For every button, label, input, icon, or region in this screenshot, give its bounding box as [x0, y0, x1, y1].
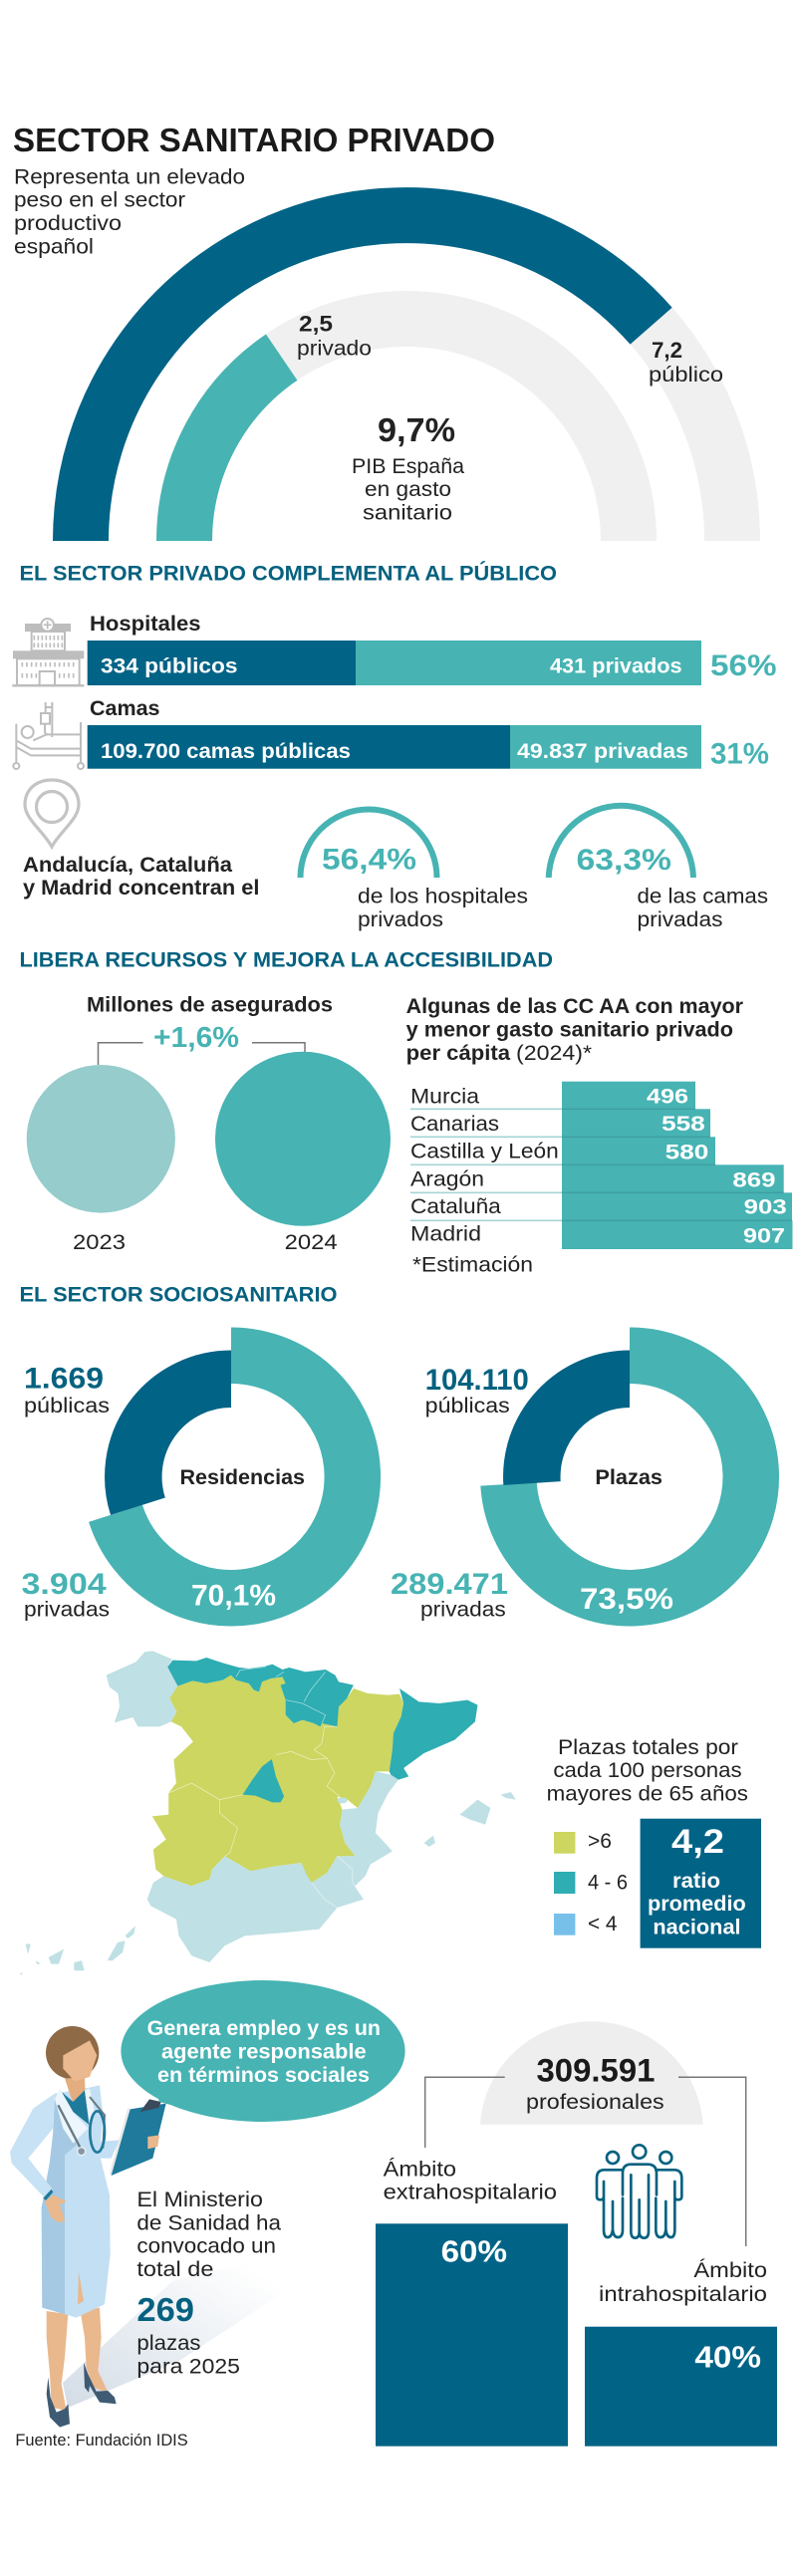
- row values: 869: [732, 1169, 775, 1192]
- panel: camas bar: 49.837 privadas: [517, 740, 688, 763]
- inner arc: total: [184, 319, 629, 541]
- row labels: Cataluña: [410, 1195, 501, 1218]
- label: 7,2 público: [649, 338, 723, 386]
- text: concentran: y Madrid concentran el: [23, 877, 259, 900]
- intro text: peso en el sector: [14, 189, 185, 212]
- map of Spain: [19, 1651, 516, 1975]
- intro text: Representa un elevado: [14, 165, 245, 188]
- regions under 4: [19, 1651, 516, 1975]
- bar: camas públicas: [88, 725, 510, 769]
- title: SECTOR SANITARIO PRIVADO: [13, 122, 495, 158]
- row values: 580: [665, 1141, 708, 1163]
- table heading: Algunas de las CC AA con mayor: [406, 995, 743, 1018]
- map legend: Plazas totales por: [558, 1736, 738, 1759]
- label: 7,2 público: 7,2: [652, 338, 682, 363]
- row labels: Murcia: [410, 1085, 479, 1108]
- row labels: Madrid: [410, 1223, 481, 1246]
- legs: [47, 2288, 117, 2428]
- arc stat: camas 63,3%: privadas: [638, 908, 723, 931]
- panel: millones de asegurados: 2024: [285, 1231, 338, 1254]
- text: ministerio: plazas: [136, 2332, 201, 2355]
- arc stat: camas 63,3%: [549, 806, 768, 931]
- arc stat: hospitales 56,4%: de los hospitales: [358, 886, 528, 908]
- arc stat: camas 63,3%: de las camas: [638, 886, 768, 908]
- label: extrahospitalario: extrahospitalario: [384, 2182, 557, 2204]
- panel: hospitales bar: [88, 613, 776, 685]
- circle 2024: [215, 1052, 391, 1226]
- legend: 4 to 6: [554, 1872, 628, 1895]
- panel: hospitales bar: Hospitales: [90, 613, 201, 636]
- text: ministerio: convocado un: [136, 2235, 276, 2258]
- row values: [647, 1085, 787, 1248]
- donut: plazas: privadas: [420, 1599, 506, 1622]
- donut: residencias: públicas: [24, 1395, 110, 1417]
- regions 4 to 6: [167, 1658, 477, 1802]
- donut: plazas: [391, 1356, 751, 1622]
- callout: genera empleo: [121, 1980, 405, 2122]
- outer arc: total: [81, 215, 732, 541]
- bar: 40%: [585, 2327, 777, 2447]
- panel: camas bar: [88, 697, 769, 771]
- callout: ratio promedio nacional: 4,2: [671, 1823, 724, 1861]
- panel: millones de asegurados: +1,6%: [153, 1022, 239, 1054]
- circle 2023: [27, 1065, 175, 1213]
- label: intrahospitalario: [599, 2259, 767, 2306]
- inner arc: privado: [184, 358, 282, 541]
- text: ministerio: total de: [136, 2258, 213, 2281]
- callout: genera empleo: Genera empleo y es un: [147, 2017, 381, 2040]
- text: ministerio: [136, 2189, 281, 2378]
- panel: hospitales bar: 56%: [710, 649, 777, 682]
- table heading: per cápita: [406, 1042, 510, 1065]
- donut: plazas: Plazas: [595, 1466, 663, 1489]
- label: intrahospitalario: intrahospitalario: [599, 2283, 767, 2306]
- illustration: doctor: [10, 2026, 166, 2428]
- donut: residencias: 3.904: [22, 1568, 107, 1601]
- text: ministerio: El Ministerio: [136, 2189, 263, 2211]
- clipboard: [110, 2099, 166, 2176]
- panel: profesionales: 309.591: [536, 2052, 655, 2088]
- callout: ratio promedio nacional: promedio: [648, 1893, 746, 1916]
- panel: camas bar: Camas: [90, 697, 159, 720]
- intro text: español: [14, 235, 94, 258]
- donut: plazas: públicas: [425, 1395, 510, 1417]
- icon: location pin: [25, 780, 79, 847]
- panel: PIB half-ring chart: [14, 165, 732, 541]
- panel: camas bar: 109.700 camas públicas: [101, 740, 351, 763]
- label: 2,5 privado: privado: [297, 338, 372, 361]
- map legend: cada 100 personas: [553, 1759, 742, 1782]
- label: 9,7% PIB: [352, 411, 464, 525]
- arc stat: hospitales 56,4%: [301, 809, 528, 931]
- callout: ratio promedio nacional: nacional: [653, 1917, 741, 1939]
- row labels: Canarias: [410, 1113, 499, 1136]
- bar: camas privadas: [510, 725, 701, 769]
- label: 7,2 público: público: [649, 364, 723, 386]
- bar: privados: [356, 641, 701, 685]
- heading: complementa: EL SECTOR PRIVADO COMPLEMENTA AL PÚBLICO: [20, 562, 557, 586]
- donut: residencias: privadas: [24, 1599, 110, 1622]
- label: 9,7% PIB: en gasto: [365, 478, 451, 501]
- row values: 558: [662, 1113, 705, 1136]
- label: extrahospitalario: Ámbito: [384, 2158, 456, 2181]
- panel: gasto per cápita table: [406, 995, 793, 1277]
- text: ministerio: para 2025: [136, 2355, 240, 2378]
- map legend: mayores de 65 años: [547, 1783, 748, 1806]
- donut: plazas: 73,5%: [580, 1583, 673, 1616]
- footnote: *Estimación: [412, 1254, 533, 1277]
- label: 2,5 privado: 2,5: [299, 312, 333, 337]
- legend: over 6: >6: [588, 1830, 612, 1853]
- donut: residencias: [22, 1356, 353, 1622]
- callout: genera empleo: agente responsable: [161, 2041, 367, 2064]
- row values: 907: [743, 1225, 785, 1248]
- map legend: [547, 1736, 748, 1935]
- bar: 60%: [376, 2223, 568, 2447]
- label: intrahospitalario: Ámbito: [693, 2259, 767, 2282]
- heading: sociosanitario: EL SECTOR SOCIOSANITARIO: [20, 1284, 337, 1307]
- row labels: [410, 1085, 559, 1246]
- label: extrahospitalario: [384, 2158, 557, 2204]
- text: ministerio: de Sanidad ha: [136, 2211, 281, 2234]
- donut: plazas: 104.110: [425, 1364, 529, 1397]
- arc stat: hospitales 56,4%: 56,4%: [322, 844, 416, 877]
- bar: 40%: 40%: [694, 2340, 761, 2375]
- table heading: y menor gasto sanitario privado: [406, 1019, 733, 1042]
- source: Fuente: Fundación IDIS: [15, 2431, 188, 2449]
- icon: people: [597, 2145, 681, 2238]
- bar: públicos: [88, 641, 356, 685]
- panel: millones de asegurados: [27, 994, 391, 1254]
- label: 2,5 privado: [297, 312, 372, 361]
- scrubs and lapels: [55, 2089, 95, 2144]
- legend: over 6: [554, 1830, 612, 1854]
- text: ministerio: 269: [136, 2291, 194, 2328]
- icon: hospital: [12, 619, 84, 685]
- intro text: productivo: [14, 212, 122, 235]
- dome: [480, 2021, 703, 2125]
- text: concentran: Andalucía, Cataluña: [23, 854, 232, 877]
- bars: [562, 1082, 793, 1249]
- legend: 4 to 6: 4 - 6: [588, 1872, 628, 1895]
- panel: profesionales: [376, 2021, 777, 2447]
- donut: residencias: 70,1%: [191, 1580, 276, 1613]
- head: [46, 2026, 99, 2104]
- shadow under doctor: [63, 2253, 301, 2408]
- callout: genera empleo: en términos sociales: [157, 2064, 370, 2087]
- row values: 903: [744, 1196, 787, 1219]
- label: 9,7% PIB: 9,7%: [378, 411, 455, 448]
- label: 9,7% PIB: PIB España: [352, 455, 464, 478]
- row labels: Aragón: [410, 1168, 484, 1191]
- legend: under 4: < 4: [588, 1913, 618, 1935]
- stethoscope: [58, 2097, 105, 2156]
- outer arc: público: [81, 215, 652, 541]
- panel: camas bar: 31%: [710, 738, 769, 771]
- heading: libera recursos: LIBERA RECURSOS Y MEJORA LA ACCESIBILIDAD: [20, 949, 553, 972]
- donut: residencias: 1.669: [24, 1362, 104, 1395]
- donut: plazas: 289.471: [391, 1568, 508, 1601]
- table heading: [406, 995, 743, 1065]
- panel: hospitales bar: 431 privados: [550, 655, 682, 678]
- panel: millones de asegurados: 2023: [73, 1231, 126, 1254]
- text: concentran: [23, 854, 259, 900]
- coat: [10, 2085, 120, 2318]
- panel: hospitales bar: 334 públicos: [101, 655, 237, 678]
- row labels: Castilla y León: [410, 1141, 559, 1163]
- panel: millones de asegurados: Millones de asegurados: [87, 994, 333, 1017]
- row values: 496: [647, 1085, 688, 1108]
- label: 9,7% PIB: sanitario: [363, 502, 452, 525]
- bar: 60%: 60%: [441, 2234, 507, 2269]
- panel: profesionales: profesionales: [526, 2091, 664, 2114]
- regions over 6: [152, 1675, 403, 1886]
- donut: residencias: Residencias: [179, 1466, 305, 1489]
- table heading: (2024)*: [516, 1042, 592, 1065]
- legend: under 4: [554, 1913, 618, 1935]
- callout: ratio promedio nacional: ratio: [672, 1870, 720, 1893]
- arc stat: camas 63,3%: 63,3%: [576, 844, 671, 877]
- callout: ratio promedio nacional: [641, 1819, 761, 1948]
- icon: bed: [13, 702, 84, 769]
- arc stat: hospitales 56,4%: privados: [358, 908, 443, 931]
- intro text: [14, 165, 245, 258]
